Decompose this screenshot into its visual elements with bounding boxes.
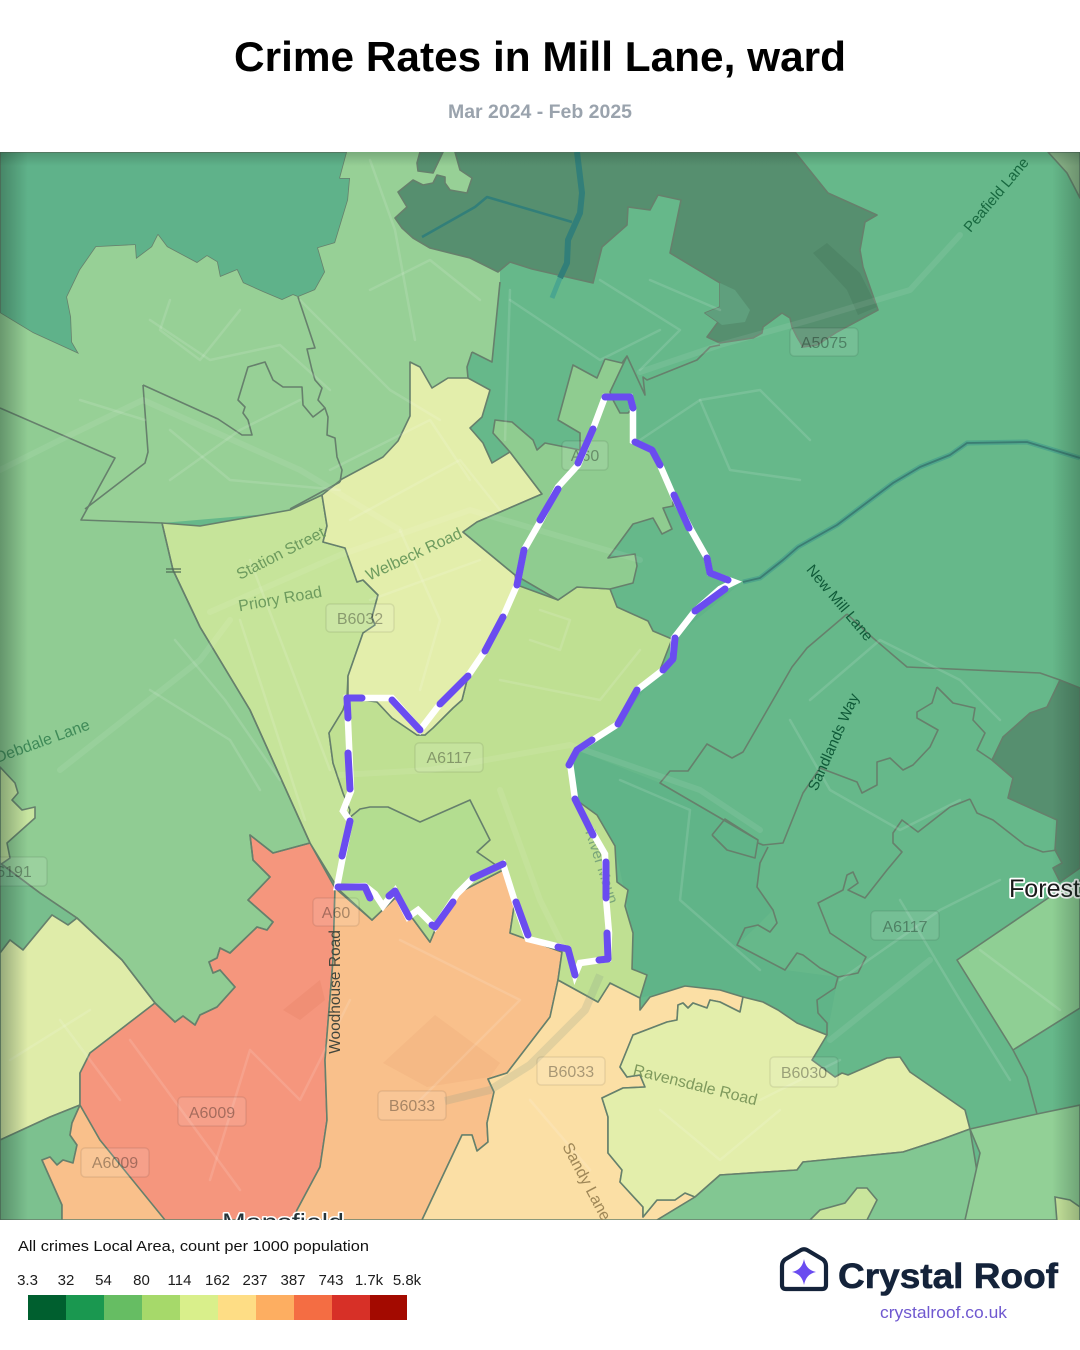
region: south-east small yellow patches [810,1188,1080,1222]
road shields: A6117 [882,919,928,936]
region: north-east corner [1048,152,1080,198]
region: north-west dark green [0,152,350,354]
road shields: A6009 [189,1105,235,1122]
road names: Woodhouse Road [327,930,344,1054]
legend scale labels: 32 [58,1272,74,1289]
road shields: B6032 [337,611,383,628]
region: green patch inside dark area [705,283,750,325]
railway symbol [166,569,181,572]
region: dark green small north patch [417,152,443,173]
river [743,442,1080,582]
road names: Sandy Lane [558,1140,614,1224]
region: east of ward slightly darker green [570,583,838,1035]
region: A60 north light green [463,356,673,600]
region: station street lime [162,495,378,887]
region: pale orange south [422,980,743,1220]
road shields: A60 [571,448,599,465]
region: Ravensdale pale yellow [602,997,970,1217]
wordmark: Crystal Roof [838,1257,1058,1296]
region: south-west mid green [0,863,77,953]
road shields: A6117 [426,750,472,767]
road names: River Maun [581,828,621,906]
road names: Sandlands Way [805,691,863,793]
region: small west strip [0,767,35,865]
road shields: B6033 [389,1098,435,1115]
legend scale labels: 387 [280,1272,306,1289]
legend title: All crimes Local Area, count per 1000 population [18,1238,369,1255]
ward boundary: Mill Lane dashed outline [337,397,734,975]
subtitle: date range: Mar 2024 - Feb 2025 [448,102,632,123]
region: red Mansfield west [80,835,335,1220]
region: south-west green [0,1105,80,1220]
region: centre lime [329,585,672,1002]
road shields: B6030 [781,1065,827,1082]
legend scale labels: 80 [133,1272,150,1289]
road names: Ravensdale Road [631,1062,759,1109]
road names: Welbeck Road [363,525,465,585]
internal ward boundaries [0,282,1060,1114]
road shields: B6033 [548,1064,594,1081]
legend scale labels: 162 [205,1272,230,1289]
legend scale labels [17,1272,422,1289]
place label: Mansfield: Mansfield [222,1209,344,1237]
legend scale labels: 1.7k [355,1272,384,1289]
region: south-east light green [965,1105,1080,1220]
road names: New Mill Lane [803,562,876,645]
legend scale labels: 237 [242,1272,268,1289]
road shields: A6009 [92,1155,138,1172]
legend scale labels: 114 [168,1272,191,1289]
stream in the north [422,152,582,298]
region: south-east green [657,1129,985,1220]
legend scale labels: 743 [318,1272,344,1289]
region: south-west pale yellow [0,915,155,1140]
region: Debdale west green [0,408,310,1025]
darker park patch in north-east dark area [813,243,877,315]
region: Forest Town light block [957,880,1080,1050]
road shields: A60 [322,905,350,922]
road names: Station Street [234,524,328,584]
road names: Peafield Lane [961,155,1033,236]
region: dark green north [395,152,878,347]
region: orange south-west [42,1105,170,1220]
road names: Priory Road [237,584,323,615]
park patch in red region [286,984,316,1020]
road shields [0,328,939,1177]
icon: house with crystal star [782,1249,826,1289]
legend colour bar [28,1295,407,1320]
title: Crime Rates in Mill Lane, ward [234,33,846,80]
brand logo [782,1249,1058,1322]
legend scale labels: 54 [95,1272,112,1289]
road shields: A5075 [801,335,847,352]
website url: crystalroof.co.uk [880,1304,1008,1322]
place label: Forest Town: Forest [1009,875,1080,903]
region: orange Mansfield centre [293,870,562,1220]
A60 road overpass band [445,975,600,1101]
legend scale labels: 5.8k [393,1272,422,1289]
region: south-centre lime sub-area [337,800,503,942]
region: north-west light green [0,152,500,523]
road names [0,155,1033,1224]
legend scale labels: 3.3 [17,1272,38,1289]
region: Welbeck pale yellow [322,362,542,735]
legend [17,1238,422,1320]
map edge vignette [0,152,1080,1220]
region: dark green east [992,680,1080,882]
road network [0,160,1060,1190]
park patch in orange region [383,1015,500,1087]
